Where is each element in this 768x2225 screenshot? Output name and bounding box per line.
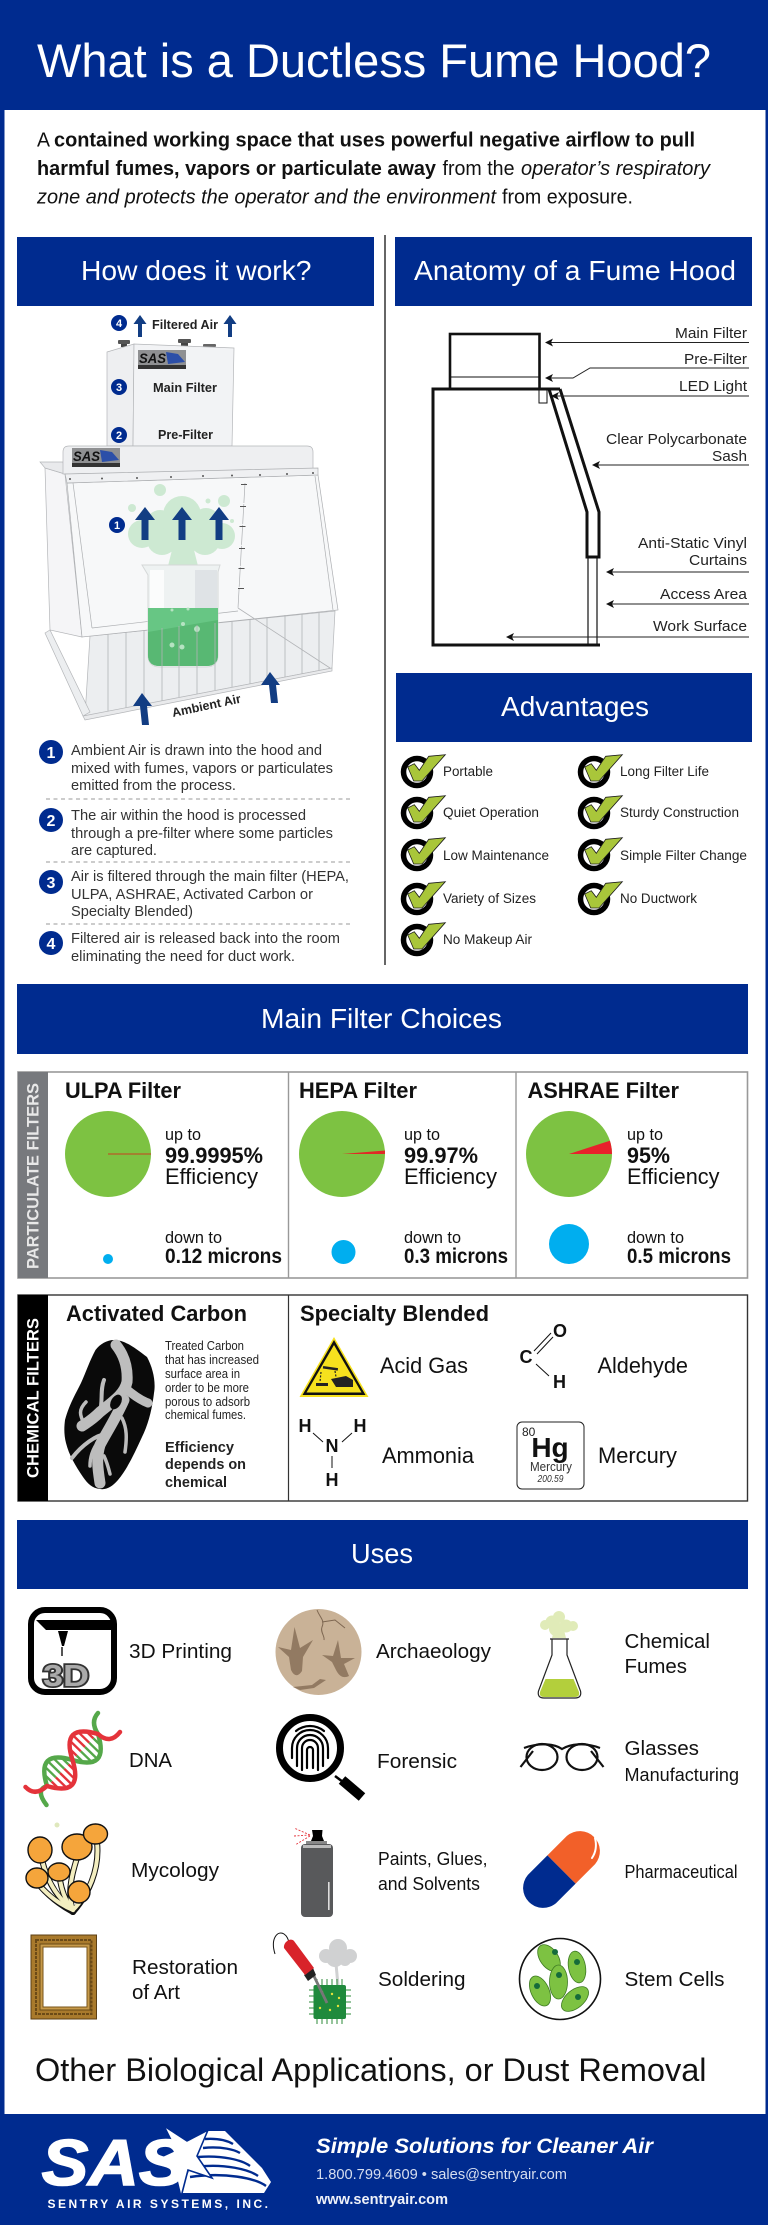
- airflow arrows inside hood: [109, 507, 229, 540]
- specialty blended: Specialty Blended: [300, 1301, 489, 1326]
- HEPA filter: HEPA Filter: [299, 1078, 417, 1103]
- icon: aldehyde structure: H: [553, 1372, 566, 1392]
- specialty blended: Ammonia: [382, 1443, 475, 1468]
- anatomy diagram: [433, 325, 749, 645]
- activated carbon: depends on: [165, 1456, 246, 1473]
- use: paints, glues and solvents spray can: and Solvents: [378, 1874, 480, 1894]
- activated carbon: order to be more: [165, 1381, 249, 1395]
- callout labels: [606, 325, 748, 635]
- use: mycology mushrooms: Mycology: [131, 1859, 220, 1882]
- illustration: ductless fume hood: [40, 315, 338, 725]
- callout labels: Clear Polycarbonate: [606, 431, 747, 448]
- use: restoration of art frame: [31, 1935, 238, 2019]
- use: 3D printing: 3D Printing: [129, 1640, 232, 1663]
- ASHRAE filter: up to: [627, 1125, 663, 1144]
- ULPA filter: 0.12 microns: [165, 1245, 282, 1268]
- advantages checklist: Low Maintenance: [443, 848, 549, 863]
- ULPA filter: Efficiency: [165, 1164, 258, 1189]
- filtered air label with arrows: 4: [116, 318, 123, 330]
- step 3: ULPA, ASHRAE, Activated Carbon or: [71, 887, 313, 903]
- filter housing: 2: [116, 430, 122, 442]
- use: stem cells: [520, 1938, 724, 2020]
- icon: mercury periodic tile: Hg: [531, 1432, 569, 1463]
- step 2: through a pre-filter where some particles: [71, 826, 333, 842]
- step 1: emitted from the process.: [71, 778, 236, 794]
- step 3: 3: [47, 875, 56, 892]
- title: What is a Ductless Fume Hood?: [37, 34, 711, 87]
- top panel logo: [72, 448, 120, 467]
- HEPA filter: Efficiency: [404, 1164, 497, 1189]
- heading: Main Filter Choices: Main Filter Choices: [261, 1003, 502, 1034]
- steps list: [39, 740, 352, 965]
- intro paragraph: A: [37, 128, 50, 152]
- ULPA filter: [65, 1078, 282, 1268]
- icon: corrosive warning triangle: [300, 1337, 368, 1397]
- use: glasses manufacturing: Glasses: [624, 1737, 699, 1760]
- use: chemical fumes: Fumes: [624, 1655, 687, 1678]
- ambient air arrows and label: [133, 672, 280, 725]
- use: restoration of art frame: of Art: [132, 1981, 180, 2004]
- intro paragraph: from exposure.: [502, 186, 633, 208]
- step 2: [39, 808, 333, 859]
- advantages checklist: [404, 755, 747, 954]
- advantages checklist: Simple Filter Change: [620, 848, 747, 863]
- step 4: Filtered air is released back into the room: [71, 931, 340, 947]
- uses grid: [26, 1609, 739, 2024]
- footer: [42, 2126, 655, 2211]
- ULPA filter: up to: [165, 1125, 201, 1144]
- contact details: 1.800.799.4609 • sales@sentryair.com: [316, 2166, 567, 2183]
- use: pharmaceutical capsule: Pharmaceutical: [624, 1861, 738, 1882]
- icon: carbon granule: [64, 1340, 155, 1489]
- panel: particulate filters: PARTICULATE FILTERS: [24, 1083, 42, 1269]
- HEPA filter: up to: [404, 1125, 440, 1144]
- heading: Main Filter Choices: [17, 984, 748, 1054]
- callout labels: Access Area: [660, 586, 748, 603]
- callout labels: Work Surface: [653, 618, 747, 635]
- icon: ammonia structure: H: [326, 1470, 338, 1490]
- step 3: Specialty Blended): [71, 904, 193, 920]
- callout labels: Anti-Static Vinyl: [638, 535, 747, 552]
- specialty blended: Mercury: [598, 1443, 677, 1468]
- filter housing: Pre-Filter: [158, 427, 213, 442]
- heading: Anatomy of a Fume Hood: Anatomy of a Fume Hood: [414, 255, 736, 286]
- other applications statement: Other Biological Applications, or Dust Removal: [35, 2052, 706, 2088]
- activated carbon: Activated Carbon: [66, 1301, 247, 1326]
- use: 3D printing: [31, 1610, 232, 1693]
- filter housing: [107, 339, 234, 446]
- intro paragraph: harmful fumes, vapors or particulate away: [37, 157, 437, 180]
- icon: aldehyde structure: O: [553, 1321, 567, 1341]
- use: paints, glues and solvents spray can: Paints, Glues,: [378, 1849, 488, 1869]
- airflow arrows inside hood: 1: [114, 520, 120, 532]
- callout labels: Sash: [712, 448, 747, 465]
- beaker with green liquid: [142, 565, 220, 667]
- use: archaeology: Archaeology: [376, 1640, 492, 1663]
- HEPA filter: [299, 1078, 508, 1268]
- step 4: 4: [47, 936, 56, 953]
- heading: How does it work: How does it work?: [81, 255, 312, 286]
- use: DNA helix: [26, 1713, 172, 1805]
- hood outline: [433, 334, 600, 645]
- step 1: 1: [47, 745, 56, 762]
- icon: mercury periodic tile: Mercury: [530, 1459, 572, 1474]
- SAS logo: SAS: [42, 2126, 186, 2199]
- activated carbon: chemical fumes.: [165, 1408, 246, 1422]
- vinyl curtain strips: [108, 608, 330, 711]
- heading: Advantages: Advantages: [501, 691, 649, 722]
- advantages checklist: No Makeup Air: [443, 932, 533, 947]
- heading: Uses: Uses: [351, 1538, 413, 1569]
- ASHRAE filter: Efficiency: [627, 1164, 720, 1189]
- top panel logo: SAS: [73, 449, 100, 464]
- panel: particulate filters: [18, 1072, 748, 1278]
- advantages checklist: Variety of Sizes: [443, 891, 536, 906]
- ambient air arrows and label: Ambient Air: [171, 692, 242, 720]
- panel: chemical filters: [18, 1295, 748, 1501]
- HEPA filter: 99.97%: [404, 1143, 478, 1168]
- filtered air label with arrows: Filtered Air: [152, 318, 218, 332]
- specialty blended: Acid Gas: [380, 1353, 468, 1378]
- advantages checklist: Quiet Operation: [443, 805, 539, 820]
- step 2: 2: [47, 813, 56, 830]
- sash: [65, 468, 338, 637]
- icon: ammonia structure: H: [298, 1416, 312, 1436]
- HEPA filter: down to: [404, 1228, 461, 1247]
- ASHRAE filter: 0.5 microns: [627, 1245, 731, 1268]
- icon: ammonia structure: N: [326, 1436, 338, 1456]
- use: chemical fumes: Chemical: [624, 1630, 710, 1653]
- callout arrows: [510, 342, 749, 637]
- fume cloud: [128, 484, 235, 566]
- advantages checklist: No Ductwork: [620, 891, 697, 906]
- step 1: [39, 740, 333, 794]
- ASHRAE filter: ASHRAE Filter: [528, 1078, 679, 1103]
- tagline: Simple Solutions for Cleaner Air: [316, 2134, 655, 2158]
- callout labels: Pre-Filter: [684, 351, 747, 368]
- icon: mercury periodic tile: [517, 1422, 584, 1489]
- activated carbon: chemical: [165, 1474, 227, 1491]
- use: pharmaceutical capsule: [523, 1831, 738, 1908]
- step 3: [39, 869, 349, 920]
- heading: How does it work: [17, 237, 374, 306]
- use: soldering iron and chip: [273, 1933, 466, 2024]
- intro paragraph: zone and protects the operator and the environment: [36, 186, 497, 208]
- use: 3D printing: 3D: [43, 1658, 89, 1693]
- callout labels: LED Light: [679, 378, 748, 395]
- activated carbon: porous to adsorb: [165, 1395, 250, 1409]
- use: glasses manufacturing: [520, 1737, 739, 1785]
- advantages checklist: Sturdy Construction: [620, 805, 739, 820]
- icon: mercury periodic tile: 80: [522, 1425, 536, 1439]
- step 3: Air is filtered through the main filter (HEPA,: [71, 869, 349, 885]
- sash screws: [69, 472, 314, 589]
- use: chemical fumes: [538, 1611, 710, 1698]
- use: mycology mushrooms: [26, 1822, 220, 1912]
- filter housing: Main Filter: [153, 380, 217, 395]
- intro paragraph: [36, 128, 712, 208]
- SAS logo: [42, 2126, 271, 2211]
- ULPA filter: down to: [165, 1228, 222, 1247]
- heading: Advantages: [396, 673, 752, 742]
- heading: Anatomy of a Fume Hood: [395, 237, 752, 306]
- use: forensic magnifier: Forensic: [377, 1750, 457, 1773]
- activated carbon: Treated Carbon: [165, 1339, 244, 1353]
- website: www.sentryair.com: [315, 2191, 448, 2208]
- icon: ammonia structure: H: [354, 1416, 366, 1436]
- callout labels: Main Filter: [675, 325, 747, 342]
- step 1: mixed with fumes, vapors or particulates: [71, 761, 333, 777]
- use: restoration of art frame: Restoration: [132, 1956, 238, 1979]
- step 2: The air within the hood is processed: [71, 808, 306, 824]
- specialty blended: [298, 1301, 688, 1490]
- filtered air label with arrows: [111, 315, 236, 337]
- step 4: eliminating the need for duct work.: [71, 949, 295, 965]
- callout labels: Curtains: [689, 552, 747, 569]
- activated carbon: [64, 1301, 259, 1491]
- activated carbon: that has increased: [165, 1353, 259, 1367]
- intro paragraph: contained working space that uses powerful negative airflow to pull: [54, 128, 695, 152]
- HEPA filter: 0.3 microns: [404, 1245, 508, 1268]
- specialty blended: Aldehyde: [598, 1353, 688, 1378]
- use: glasses manufacturing: Manufacturing: [624, 1764, 739, 1785]
- SAS logo: SENTRY AIR SYSTEMS, INC.: [48, 2197, 268, 2211]
- column divider: [384, 235, 386, 965]
- step 1: Ambient Air is drawn into the hood and: [71, 743, 322, 759]
- use: DNA helix: DNA: [129, 1749, 172, 1772]
- intro paragraph: operator’s respiratory: [521, 157, 712, 180]
- ASHRAE filter: 95%: [627, 1143, 670, 1168]
- ULPA filter: 99.9995%: [165, 1143, 263, 1168]
- use: soldering iron and chip: Soldering: [378, 1968, 466, 1991]
- icon: ammonia structure: [298, 1416, 366, 1490]
- panel: chemical filters: CHEMICAL FILTERS: [24, 1318, 42, 1478]
- icon: mercury periodic tile: 200.59: [537, 1474, 564, 1485]
- ASHRAE filter: down to: [627, 1228, 684, 1247]
- activated carbon: Efficiency: [165, 1439, 235, 1456]
- icon: aldehyde structure: [520, 1321, 567, 1392]
- advantages checklist: Portable: [443, 764, 493, 779]
- advantages checklist: Long Filter Life: [620, 764, 709, 779]
- activated carbon: surface area in: [165, 1367, 240, 1381]
- use: forensic magnifier: [280, 1718, 457, 1797]
- filter housing: SAS: [139, 351, 166, 366]
- use: paints, glues and solvents spray can: [294, 1828, 488, 1917]
- ULPA filter: ULPA Filter: [65, 1078, 181, 1103]
- step 2: are captured.: [71, 843, 157, 859]
- use: archaeology: [276, 1609, 492, 1695]
- step 4: [39, 931, 340, 965]
- use: stem cells: Stem Cells: [624, 1968, 724, 1991]
- icon: aldehyde structure: C: [520, 1347, 532, 1367]
- heading: Uses: [17, 1520, 748, 1589]
- ASHRAE filter: [526, 1078, 731, 1268]
- intro paragraph: from the: [442, 157, 514, 180]
- hood top panel and body: [40, 446, 335, 720]
- filter housing: 3: [116, 382, 122, 394]
